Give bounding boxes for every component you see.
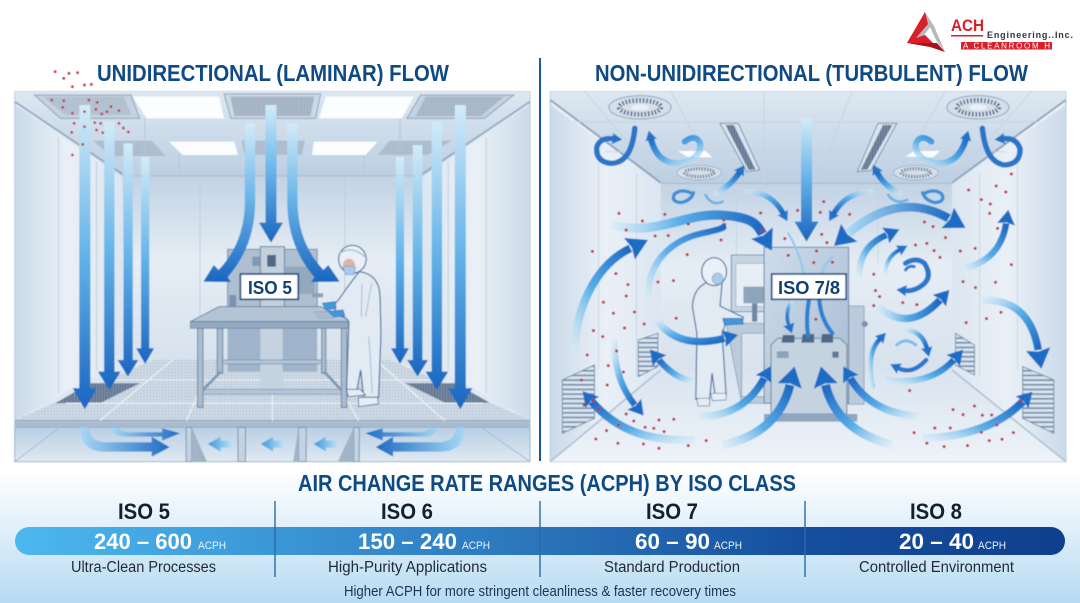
vertical airflow arrows: left — [73, 105, 154, 409]
column: ISO 5: ACPH — [198, 540, 226, 552]
column: ISO 6 — [328, 499, 490, 576]
heading: unidirectional flow: UNIDIRECTIONAL (LAMINAR) FLOW — [97, 60, 449, 86]
column: ISO 6: ISO 6 — [381, 499, 433, 524]
equipment: central tower and base — [764, 247, 857, 422]
column: ISO 7: 60 – 90 — [635, 529, 710, 554]
column: ISO 5 — [71, 499, 226, 576]
column: ISO 6: ACPH — [462, 540, 490, 552]
machine on bench — [228, 247, 323, 389]
panel: laminar cleanroom — [15, 72, 530, 462]
label: ISO 5 — [240, 274, 298, 299]
heading: non-unidirectional flow: NON-UNIDIRECTIONAL (TURBULENT) FLOW — [595, 60, 1028, 86]
column: ISO 5: 240 – 600 — [94, 529, 192, 554]
column: ISO 7 — [604, 499, 742, 576]
column: ISO 5: Ultra-Clean Processes — [71, 559, 216, 576]
label text: ISO 5: ISO 5 — [248, 278, 292, 298]
label text: ISO 7/8: ISO 7/8 — [778, 278, 840, 298]
logo: ACH Engineering: ACH — [951, 16, 984, 35]
work bench — [190, 307, 353, 407]
equipment: rear machine — [726, 255, 868, 404]
column: ISO 6: 150 – 240 — [358, 529, 457, 554]
turbulent arrows: upper right — [877, 128, 1020, 203]
turbulent arrows: right side — [825, 207, 1038, 445]
vertical airflow arrows: right — [391, 105, 472, 409]
perforated raised floor — [15, 360, 530, 427]
column: ISO 7: ISO 7 — [646, 499, 698, 524]
turbulent arrows: left side — [574, 215, 790, 445]
logo: ACH Engineering: Engineering..Inc. — [987, 30, 1073, 40]
heading: ACPH section: AIR CHANGE RATE RANGES (ACPH) BY ISO CLASS — [298, 470, 796, 496]
contaminant particles — [52, 72, 128, 155]
column: ISO 8: ACPH — [978, 540, 1006, 552]
cleanroom worker — [314, 245, 381, 407]
column: ISO 8 — [859, 499, 1015, 576]
panel: turbulent cleanroom — [550, 92, 1066, 462]
column: ISO 7: ACPH — [714, 540, 742, 552]
underfloor plenum — [15, 427, 530, 462]
column: ISO 8: ISO 8 — [910, 499, 962, 524]
ACPH range bar — [15, 527, 1065, 555]
central downflow arrow — [794, 118, 819, 242]
column: ISO 8: Controlled Environment — [859, 559, 1015, 576]
logo: ACH Engineering: A CLEANROOM H — [963, 42, 1050, 51]
room shell — [550, 92, 1066, 462]
contaminant particles — [581, 174, 1021, 448]
turbulent arrows: upper left — [597, 128, 871, 213]
underfloor return arrows — [80, 427, 465, 457]
logo: ACH Engineering — [907, 12, 1073, 52]
footnote: Higher ACPH for more stringent cleanliness & faster recovery times — [344, 584, 736, 600]
column: ISO 7: Standard Production — [604, 559, 740, 576]
column: ISO 8: 20 – 40 — [899, 529, 974, 554]
ceiling slot vents — [720, 123, 897, 172]
central arrows over machine — [203, 105, 340, 282]
cleanroom worker — [692, 258, 743, 406]
inner swirl arrows — [787, 233, 928, 387]
column: ISO 6: High-Purity Applications — [328, 559, 487, 576]
label: ISO 7/8 — [772, 274, 846, 299]
room shell — [15, 92, 530, 462]
column: ISO 5: ISO 5 — [118, 499, 170, 524]
return air grilles — [562, 333, 1054, 433]
ceiling diffusers — [609, 96, 1009, 180]
